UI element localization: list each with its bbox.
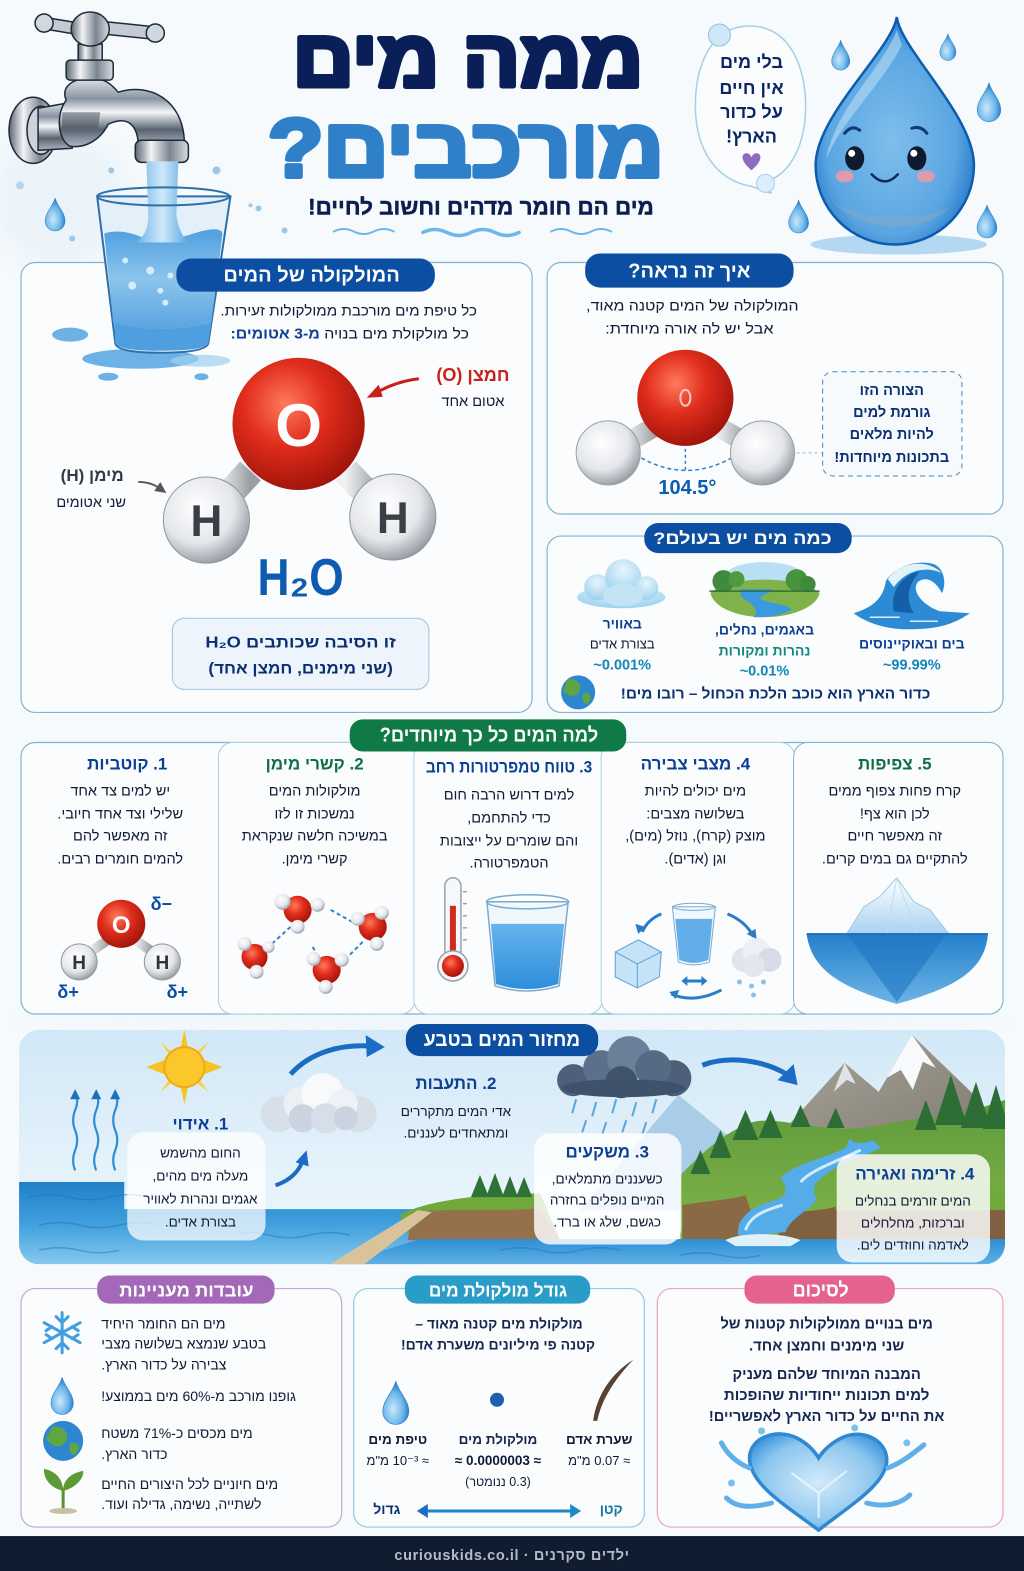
panel: water cycle	[19, 1024, 1009, 1266]
intro text: המולקולה של המים קטנה מאוד,	[586, 298, 799, 315]
icon: faucet	[9, 12, 188, 163]
column 2: hydrogen bonds: קשרי מימן.	[282, 852, 348, 868]
label: oxygen: אטום אחד	[441, 394, 504, 410]
glass	[486, 895, 569, 991]
heading pill: how it looks: איך זה נראה?	[628, 261, 751, 283]
large H2O molecule diagram: O	[275, 392, 322, 459]
fact: three states: מים הם החומר היחיד	[101, 1316, 226, 1332]
heading pill: molecule size	[405, 1276, 590, 1304]
column 3: temperature range: למים דרוש הרבה חום	[444, 787, 574, 804]
blue planet sentence: כדור הארץ הוא כוכב הלכת הכחול – רובו מים!	[621, 685, 930, 702]
speech bubble	[695, 24, 806, 193]
heading pill: why special	[350, 719, 626, 752]
subtitle: מים הם חומר מדהים וחשוב לחיים!	[308, 194, 654, 219]
step 4: runoff and storage	[837, 1154, 990, 1263]
column 1: polarity: 1. קוטביות	[87, 755, 167, 774]
label: hydrogen: מימן (H)	[61, 466, 124, 485]
label: hydrogen: שני אטומים	[56, 495, 126, 511]
white cloud	[261, 1073, 377, 1133]
polar molecule: H	[72, 953, 86, 974]
step 1: evaporation: אגמים ונהרות לאוויר	[143, 1191, 258, 1206]
column dividers	[218, 742, 1003, 1014]
cycle arrows	[635, 914, 757, 999]
column 1: polarity: להמים חומרים רבים.	[57, 851, 183, 868]
step 2: condensation: אדי המים מתקררים	[401, 1104, 512, 1119]
panel: fun facts	[21, 1289, 342, 1527]
column 4: states of matter: בשלושה מצבים:	[646, 806, 745, 823]
column 2: hydrogen bonds: במשיכה חלשה שנקראת	[242, 828, 388, 845]
size intro text: קטנה פי מיליונים משערת אדם!	[401, 1337, 595, 1353]
polar molecule: H	[155, 953, 169, 974]
size arrow: גדול	[373, 1501, 401, 1517]
fact: earth coverage: מים מכסים כ-71% משטח	[101, 1425, 253, 1441]
label: human hair	[566, 1432, 633, 1468]
dashed note: להיות מלאים	[850, 427, 934, 443]
label: water drop: טיפת מים	[368, 1432, 427, 1447]
heading pill: why special: למה המים כל כך מיוחדים?	[380, 724, 598, 746]
title: מורכבים?	[268, 103, 664, 194]
fact: earth coverage	[101, 1425, 253, 1462]
column 1: polarity: שלילי וצד אחד חיובי.	[57, 806, 183, 823]
scene artwork	[19, 1030, 1009, 1266]
summary text: המבנה המיוחד שלהם מעניק	[732, 1366, 921, 1383]
column 5: density: 5. צפיפות	[858, 755, 932, 774]
evaporation arrows	[70, 1089, 120, 1170]
icon: globe	[43, 1421, 83, 1461]
heading pill: summary	[744, 1276, 895, 1304]
panel: water molecule	[21, 263, 532, 712]
step 3: precipitation: המיים נופלים בחזרה	[550, 1192, 665, 1207]
size arrow: קטן	[600, 1501, 623, 1517]
polar molecule: δ+	[167, 982, 188, 1002]
footer: ילדים סקרנים · curiouskids.co.il	[394, 1548, 630, 1564]
step 1: evaporation	[127, 1114, 266, 1240]
panel: how does it look	[547, 263, 1003, 514]
heading pill: water cycle: מחזור המים בטבע	[424, 1029, 580, 1051]
wave divider	[334, 229, 611, 235]
title: ממה מים	[293, 13, 643, 103]
dashed note: בתכונות מיוחדות!	[834, 450, 949, 466]
column 4: states of matter: מוצק (קרח), נוזל (מים),	[625, 828, 766, 845]
label: water molecule: ≈ 0.0000003 ≈	[455, 1453, 542, 1468]
label: oceans	[859, 635, 965, 673]
column 4: states of matter: מים יכולים להיות	[645, 783, 746, 800]
molecule intro text: כל מולקולת מים בנויה מ-3 אטומים:	[230, 326, 469, 343]
step 1: evaporation: החום מהשמש	[160, 1145, 241, 1160]
polar molecule: O	[112, 912, 131, 939]
label: lakes and rivers: ~0.01%	[740, 663, 789, 679]
heading pill: how much water: כמה מים יש בעולם?	[653, 529, 832, 548]
heading pill: summary: לסיכום	[793, 1280, 849, 1302]
summary text: את החיים על כדור הארץ לאפשריים!	[709, 1408, 944, 1425]
panel: why water is special	[21, 742, 1003, 1014]
step 3: precipitation: 3. משקעים	[565, 1142, 649, 1161]
column 4: states of matter: וגן (אדים).	[664, 852, 726, 868]
column 3: temperature range: כדי להתחמם,	[467, 810, 551, 827]
size arrow	[373, 1501, 623, 1518]
column 2: hydrogen bonds: מולקולות המים	[269, 783, 360, 800]
thermometer	[438, 878, 468, 981]
label: human hair: ≈ 0.07 מ"מ	[568, 1453, 630, 1468]
icon: glass of water	[52, 161, 230, 381]
heading pill: water molecule: המולקולה של המים	[223, 265, 400, 287]
icon: hair	[593, 1360, 633, 1421]
column 4: states of matter	[615, 755, 782, 999]
cycle arrow: cloud to condensation	[291, 1035, 385, 1074]
fact: earth coverage: כדור הארץ.	[101, 1446, 167, 1462]
step 4: runoff and storage: 4. זרימה ואגירה	[855, 1164, 975, 1183]
small drops and splashes left	[16, 166, 288, 241]
step 3: precipitation: כגשם, שלג או ברד.	[553, 1214, 661, 1229]
icon: smiling water drop character	[811, 17, 987, 255]
label: water molecule	[455, 1432, 542, 1489]
heading pill: how it looks	[585, 254, 794, 288]
step 3: precipitation	[534, 1133, 681, 1244]
label: human hair: שערת אדם	[566, 1432, 633, 1447]
footer	[0, 1536, 1024, 1571]
polar molecule: δ+	[57, 982, 79, 1002]
summary text: למים תכונות ייחודיות שהופכות	[724, 1387, 929, 1404]
column 5: density: קרח פחות צפוף ממים	[828, 784, 961, 800]
summary text	[709, 1316, 944, 1425]
fact: three states	[101, 1316, 266, 1373]
molecule intro text	[220, 303, 477, 343]
column 1: polarity: יש למים צד אחד	[70, 783, 170, 800]
step 3: precipitation: כשעננים מתמלאים,	[552, 1171, 663, 1186]
heading pill: water cycle	[406, 1024, 598, 1056]
label: air: בצורת אדים	[590, 636, 655, 651]
size intro text	[401, 1316, 595, 1353]
label: water molecule: (0.3 ננומטר)	[465, 1475, 531, 1489]
large H2O molecule diagram: H	[190, 497, 222, 546]
column 3: temperature range: הטמפרטורה.	[469, 856, 549, 872]
step 4: runoff and storage: לאדמה וחוזדים לים.	[857, 1237, 969, 1252]
step 1: evaporation: 1. אידוי	[172, 1114, 228, 1133]
column 1: polarity	[57, 755, 188, 1002]
dashed note	[797, 372, 962, 476]
icon: molecule dot	[490, 1393, 504, 1407]
label: air: ~0.001%	[593, 657, 651, 673]
small drops right	[789, 34, 1001, 238]
intro text	[586, 298, 799, 338]
icon: water drop scale	[383, 1381, 409, 1424]
icon: landscape with river	[709, 562, 820, 617]
step 4: runoff and storage: וברכזות, מחלחלים	[861, 1215, 965, 1230]
vapor cloud	[731, 938, 782, 997]
column 4: states of matter: 4. מצבי צבירה	[641, 755, 751, 774]
label: oxygen	[367, 365, 510, 410]
step 4: runoff and storage: המים זורמים בנחלים	[855, 1193, 971, 1208]
label: lakes and rivers: באגמים, נחלים,	[715, 621, 814, 637]
icon: water heart	[721, 1424, 924, 1530]
icon: drop	[51, 1377, 73, 1414]
label: oceans: ~99.99%	[883, 657, 941, 673]
step 1: evaporation: מעלה מים מהים,	[153, 1168, 248, 1183]
heading pill: fun facts: עובדות מעניינות	[119, 1281, 254, 1301]
callout: why H2O	[172, 618, 429, 689]
icon: sprout	[44, 1469, 83, 1514]
column 2: hydrogen bonds	[237, 755, 389, 994]
sun	[146, 1030, 222, 1104]
speech bubble: הארץ!	[726, 126, 777, 146]
speech bubble: בלי מים	[720, 52, 783, 72]
small glass	[672, 903, 715, 965]
label: water drop: ≈ 10⁻³ מ"מ	[367, 1453, 429, 1468]
column 2: hydrogen bonds: נמשכות זו לזו	[275, 806, 355, 823]
summary text: מים בנויים ממולקולות קטנות של	[720, 1316, 933, 1333]
step 1: evaporation: בצורת אדים.	[165, 1214, 236, 1229]
label: hydrogen	[56, 466, 166, 511]
fact: life	[101, 1476, 278, 1512]
heading pill: molecule size: גודל מולקולת מים	[429, 1281, 567, 1301]
icon: wave	[854, 563, 970, 629]
column 5: density	[807, 755, 988, 1004]
icon: air cloud	[577, 559, 665, 608]
icon: globe	[561, 675, 595, 709]
cycle arrow: rain to mountains	[702, 1060, 798, 1085]
molecule intro text: כל טיפת מים מורכבת ממולקולות זעירות.	[220, 303, 477, 320]
size intro text: מולקולת מים קטנה מאוד –	[415, 1316, 583, 1332]
step 2: condensation: ומתאחדים לעננים.	[404, 1125, 508, 1140]
fact: life: לשתייה, נשימה, גדילה ועוד.	[101, 1496, 261, 1512]
iceberg	[807, 878, 988, 1004]
panel: how much water	[547, 536, 1003, 712]
dashed note: גורמת למים	[853, 405, 930, 421]
heading pill: how much water	[644, 523, 852, 553]
icon: snowflake	[44, 1313, 80, 1353]
panel: summary	[657, 1289, 1003, 1530]
column 2: hydrogen bonds: 2. קשרי מימן	[266, 755, 364, 774]
label: lakes and rivers	[715, 621, 814, 679]
label: lakes and rivers: נהרות ומקורות	[719, 642, 810, 658]
fact: three states: צבירה על כדור הארץ.	[101, 1357, 227, 1373]
callout: why H2O: (שני מימנים, חמצן אחד)	[208, 659, 393, 677]
bent molecule with angle	[576, 350, 795, 499]
heading pill: fun facts	[97, 1276, 275, 1304]
dashed note: הצורה הזו	[860, 383, 924, 399]
step 2: condensation: 2. התעבות	[415, 1074, 496, 1093]
summary text: שני מימנים וחמצן אחד.	[749, 1338, 904, 1355]
column 5: density: זה מאפשר חיים	[847, 829, 942, 845]
large H2O molecule diagram: H	[377, 494, 409, 543]
ice cube	[615, 940, 661, 988]
fact: body water: גופנו מורכב מ-60% מים בממוצע!	[101, 1388, 296, 1404]
large H2O molecule diagram	[163, 358, 436, 563]
polar molecule	[57, 894, 188, 1002]
label: water drop	[367, 1432, 429, 1468]
column 3: temperature range: 3. טווח טמפרטורות רחב	[426, 758, 592, 777]
label: oxygen: חמצן (O)	[436, 365, 510, 385]
speech bubble: על כדור	[720, 102, 783, 122]
title	[268, 13, 664, 194]
label: water molecule: מולקולת מים	[459, 1432, 537, 1447]
column 3: temperature range: והם שומרים על ייצובות	[440, 833, 578, 850]
speech bubble: אין חיים	[719, 78, 784, 98]
bent molecule with angle: 104.5°	[658, 477, 716, 499]
column 3: temperature range	[426, 758, 592, 991]
cycle arrow: evaporation to cloud	[276, 1150, 309, 1185]
column 5: density: לכן הוא צף!	[860, 806, 930, 823]
column 5: density: להתקיים גם במים קרים.	[822, 851, 968, 868]
fact: life: מים חיוניים לכל היצורים החיים	[101, 1476, 278, 1492]
callout: why H2O: זו הסיבה שכותבים H₂O	[205, 633, 396, 651]
heading pill: water molecule	[176, 259, 435, 292]
panel: molecule size	[354, 1289, 644, 1527]
label: air: באוויר	[603, 615, 642, 631]
molecule network	[237, 894, 389, 994]
fact: three states: בטבע שנמצא בשלושה מצבי	[101, 1336, 266, 1352]
H2O formula: H₂O	[258, 549, 344, 607]
polar molecule: δ−	[151, 894, 172, 914]
column 1: polarity: זה מאפשר להם	[73, 828, 168, 845]
intro text: אבל יש לה אורה מיוחדת:	[605, 321, 774, 338]
dark rain cloud	[557, 1036, 691, 1134]
label: oceans: בים ובאוקיינוסים	[859, 635, 965, 651]
label: air	[590, 615, 655, 673]
step 2: condensation	[401, 1074, 512, 1140]
